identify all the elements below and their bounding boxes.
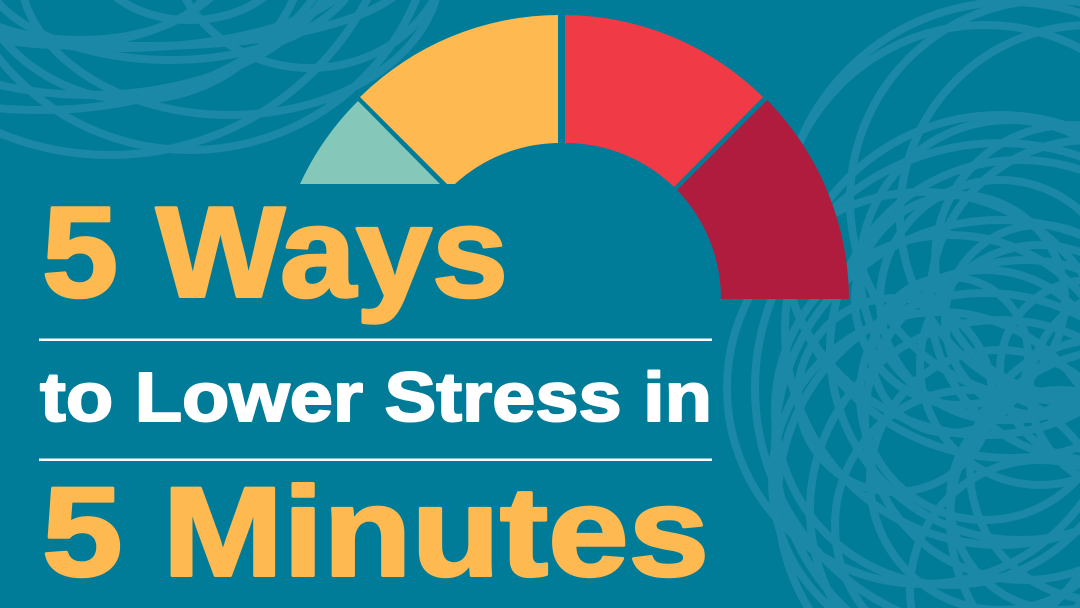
gauge segment: red: [565, 15, 763, 187]
gauge segment: dark red: [677, 100, 849, 299]
gauge segment: teal: [300, 101, 440, 184]
divider: lower: [39, 458, 712, 461]
title line: to Lower Stress in: to Lower Stress in: [40, 358, 712, 436]
background scribble: right side: [727, 0, 1080, 608]
background scribble: top left: [0, 0, 450, 155]
title line: 5 Minutes: 5 Minutes: [42, 460, 709, 602]
divider: upper: [39, 338, 712, 341]
stress gauge: [300, 15, 849, 299]
gauge segment: yellow: [360, 15, 558, 184]
title line: 5 Ways: 5 Ways: [42, 180, 508, 324]
